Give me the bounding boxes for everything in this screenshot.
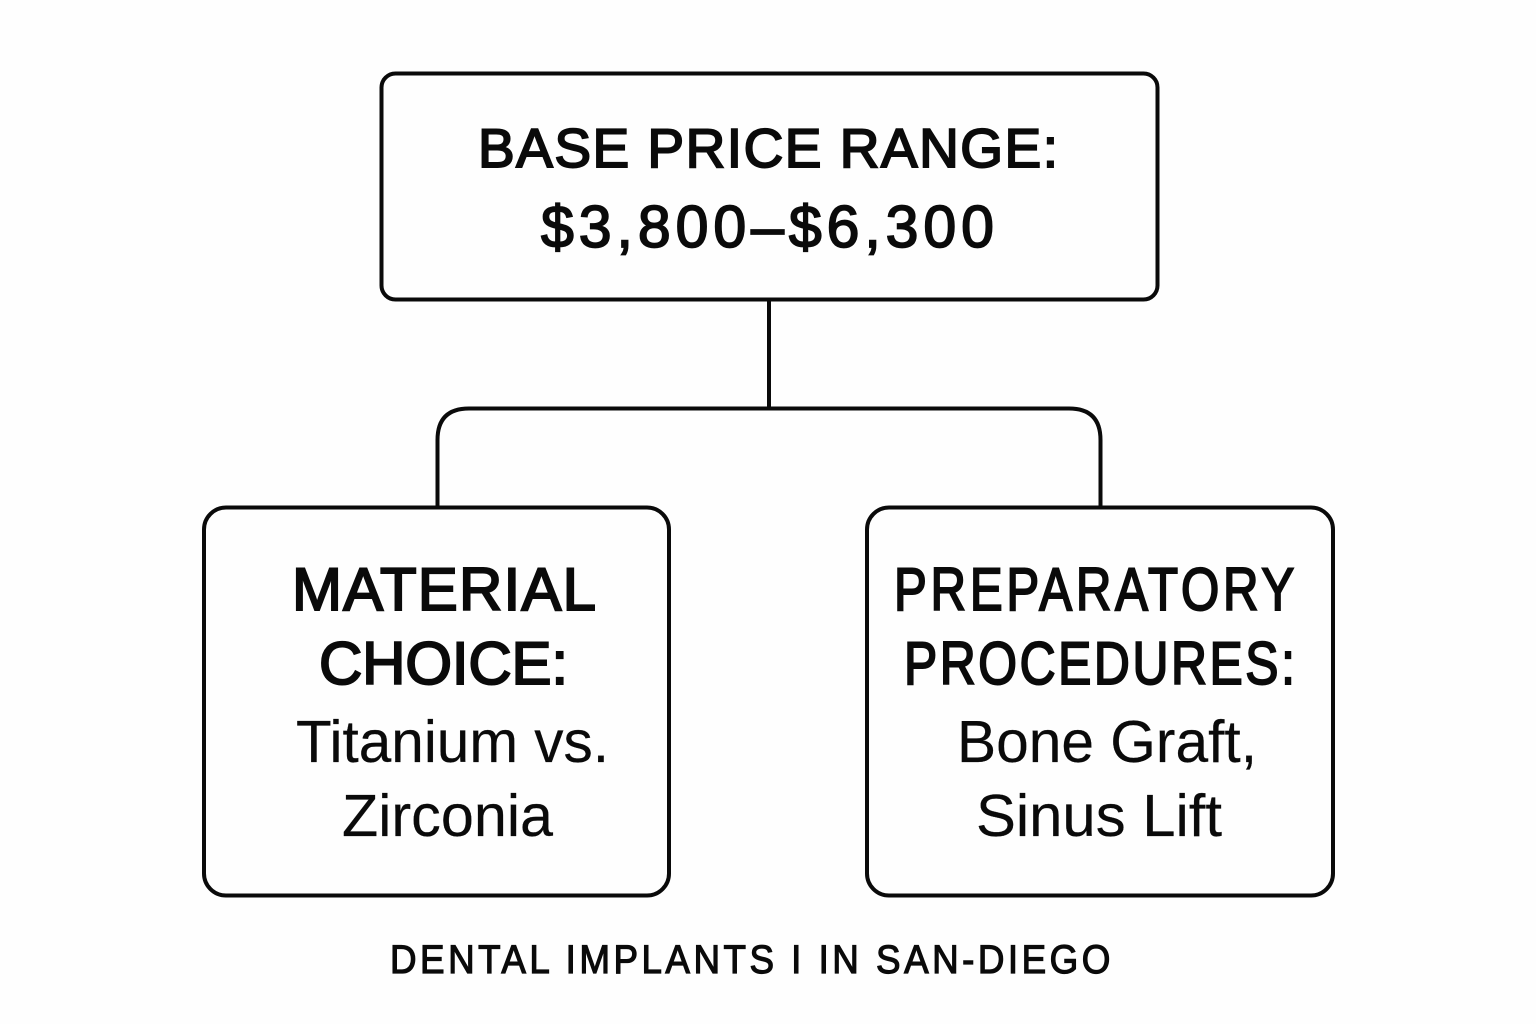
connector: stem from base price to branch <box>767 300 771 408</box>
footer caption: DENTAL IMPLANTS I IN SAN-DIEGO <box>390 938 1110 982</box>
text: sinus lift: Sinus Lift <box>976 783 1222 849</box>
heading: base price range: BASE PRICE RANGE: <box>478 117 1058 179</box>
price range value: $3,800–$6,300 <box>541 194 994 260</box>
connector: branch to both factor boxes <box>438 408 1100 506</box>
text: zirconia: Zirconia <box>342 783 553 849</box>
heading: material: MATERIAL <box>292 556 596 623</box>
preparatory procedures box <box>867 508 1333 896</box>
material choice box <box>204 508 669 896</box>
base price box <box>382 74 1158 300</box>
heading: procedures: PROCEDURES: <box>904 630 1295 697</box>
panel: preparatory procedures <box>867 508 1333 896</box>
heading: preparatory: PREPARATORY <box>894 555 1294 623</box>
text: bone graft: Bone Graft, <box>957 709 1257 775</box>
text: titanium vs.: Titanium vs. <box>296 709 609 775</box>
panel: base price range <box>382 74 1158 300</box>
heading: choice: CHOICE: <box>319 630 568 697</box>
panel: material choice <box>204 508 669 896</box>
